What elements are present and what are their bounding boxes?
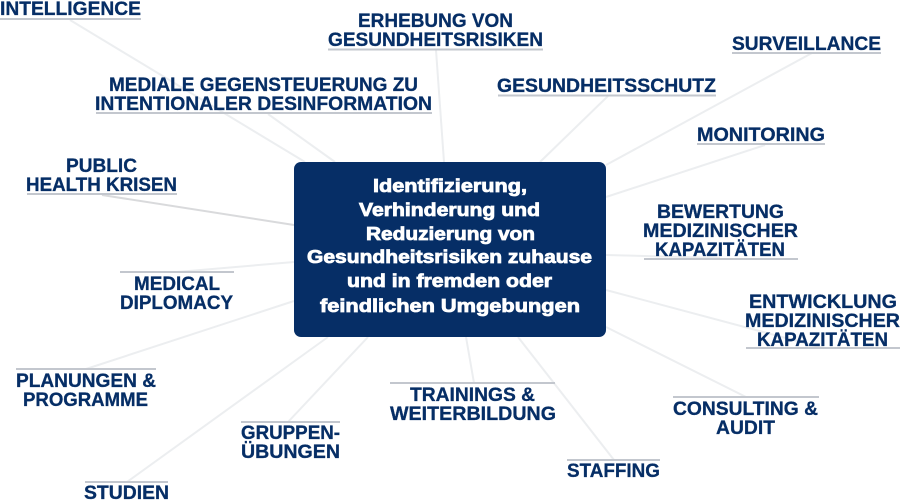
label: Trainings und Weiterbildung — [390, 382, 556, 425]
label: Bewertung medizinischer Kapazitaeten: KAPAZITÄTEN — [655, 238, 785, 261]
label: Mediale Gegensteuerung: INTENTIONALER DESINFORMATION — [95, 93, 432, 115]
central box: und in fremden oder — [347, 270, 552, 291]
central box: Identifizierung, — [373, 175, 527, 196]
label: Staffing: STAFFING — [567, 460, 660, 482]
label: Mediale Gegensteuerung — [95, 74, 432, 115]
label: Consulting und Audit: AUDIT — [716, 417, 775, 439]
central box: Verhinderung und — [359, 199, 540, 220]
central box — [294, 162, 606, 337]
central box: Gesundheitsrisiken zuhause — [307, 246, 592, 267]
label: Medical Diplomacy: DIPLOMACY — [120, 292, 233, 314]
label: Consulting und Audit — [673, 396, 819, 439]
label: Erhebung von Gesundheitsrisiken — [328, 10, 543, 51]
label: Mediale Gegensteuerung: MEDIALE GEGENSTEUERUNG ZU — [109, 74, 418, 96]
label: Consulting und Audit: CONSULTING & — [673, 398, 818, 420]
label: Medical Diplomacy: MEDICAL — [134, 273, 220, 295]
label: Gruppenuebungen — [241, 421, 340, 463]
label: Planungen und Programme: PLANUNGEN & — [16, 370, 156, 392]
label: Bewertung medizinischer Kapazitaeten — [643, 201, 798, 261]
label: Public Health Krisen: HEALTH KRISEN — [26, 174, 177, 196]
label: Entwicklung medizinischer Kapazitaeten: MEDIZINISCHER — [745, 310, 900, 332]
label: Gesundheitsschutz: GESUNDHEITSSCHUTZ — [497, 75, 716, 97]
label: Trainings und Weiterbildung: TRAININGS & — [410, 384, 535, 406]
label: Public Health Krisen — [26, 155, 177, 196]
label: Medical Diplomacy — [120, 271, 234, 314]
central box: Reduzierung von — [366, 223, 535, 244]
connector lines — [70, 20, 823, 482]
label: Trainings und Weiterbildung: WEITERBILDUNG — [390, 403, 556, 425]
label: Planungen und Programme: PROGRAMME — [23, 389, 148, 411]
central box: feindlichen Umgebungen — [320, 295, 580, 316]
label: Gruppenuebungen: GRUPPEN- — [241, 422, 340, 444]
label: Erhebung von Gesundheitsrisiken: GESUNDHEITSRISIKEN — [328, 29, 543, 51]
label: Entwicklung medizinischer Kapazitaeten: ENTWICKLUNG — [749, 291, 897, 313]
label: Entwicklung medizinischer Kapazitaeten: KAPAZITÄTEN — [757, 328, 888, 351]
label: Erhebung von Gesundheitsrisiken: ERHEBUNG VON — [358, 10, 513, 32]
label: Bewertung medizinischer Kapazitaeten: MEDIZINISCHER — [643, 220, 798, 242]
label: Bewertung medizinischer Kapazitaeten: BEWERTUNG — [657, 201, 784, 223]
label: Monitoring: MONITORING — [697, 124, 825, 146]
label: Entwicklung medizinischer Kapazitaeten — [745, 291, 900, 351]
label: Gruppenuebungen: ÜBUNGEN — [241, 440, 340, 463]
label: Surveillance: SURVEILLANCE — [732, 33, 881, 55]
label: Planungen und Programme — [16, 368, 156, 411]
label: Public Health Krisen: PUBLIC — [66, 155, 137, 177]
